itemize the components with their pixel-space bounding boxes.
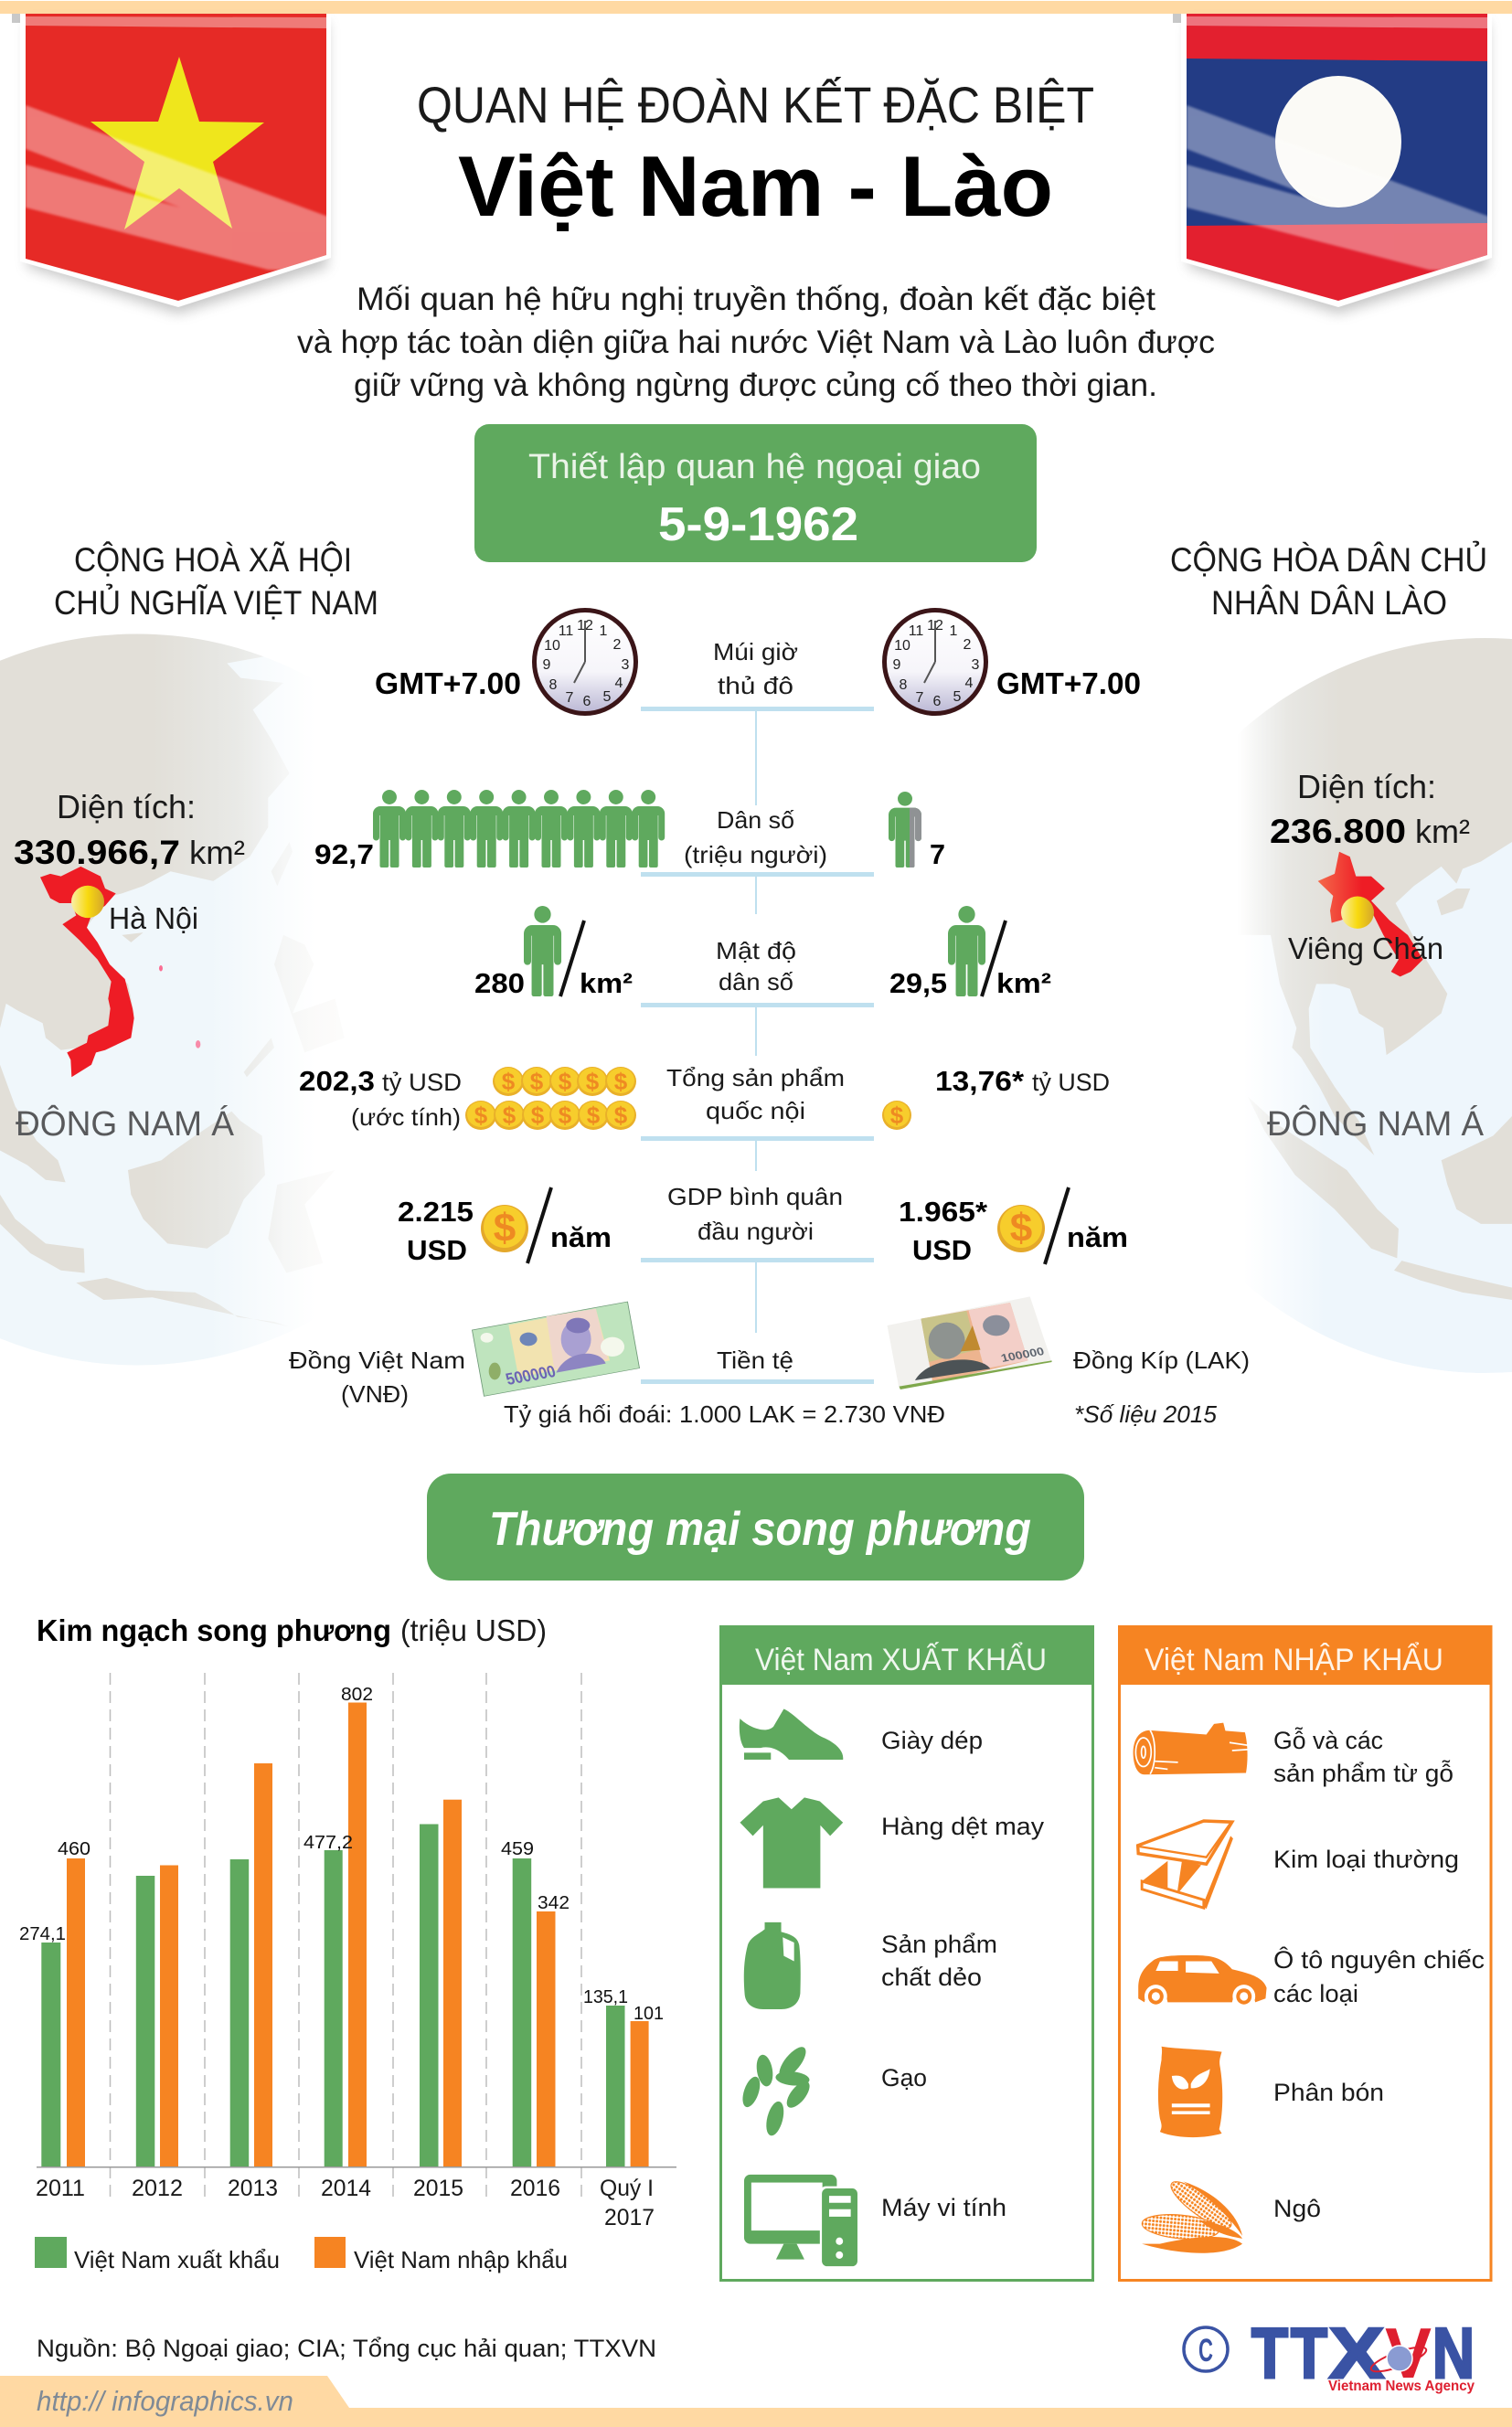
bar chart: bilateral trade turnover: Quý I <box>600 2176 654 2201</box>
heading: Laos official name <box>1170 540 1487 622</box>
chart title: Kim ngạch song phương <box>37 1613 391 1647</box>
panel: Vietnam imports: Kim loại thường <box>1273 1846 1459 1873</box>
Vietnam area and capital: Diện tích: <box>57 788 196 825</box>
density: Laos 29.5 per km2 <box>889 906 1051 999</box>
GDP: Laos: tỷ USD <box>1032 1069 1110 1096</box>
GDP: Vietnam coins: $ <box>559 1068 572 1095</box>
Vietnam area and capital: 330.966,7 <box>14 834 180 871</box>
clock right: 6 <box>933 694 942 709</box>
bar chart: bilateral trade turnover: 459 <box>501 1839 534 1859</box>
panel: Vietnam imports <box>1118 1625 1492 2280</box>
TTXVN logo: T <box>1291 2313 1327 2393</box>
GDP: Vietnam text <box>299 1065 462 1131</box>
GDP: Vietnam coins: $ <box>614 1068 628 1095</box>
title <box>417 76 1094 234</box>
label: Southeast Asia right: ĐÔNG NAM Á <box>1267 1103 1485 1144</box>
GDP: Vietnam coins: $ <box>474 1102 488 1129</box>
footer band <box>0 2376 1512 2427</box>
row labels: Múi giờ <box>713 638 798 665</box>
panel: Vietnam exports: Máy vi tính <box>881 2194 1006 2221</box>
panel: Vietnam exports: Gạo <box>881 2064 927 2092</box>
moon disc <box>1275 76 1401 208</box>
Laos area and capital <box>1270 768 1470 965</box>
panel: Vietnam imports: Ngô <box>1273 2195 1321 2222</box>
clock left: 2 <box>613 637 622 653</box>
row labels: Tiền tệ <box>717 1347 793 1374</box>
bar chart: bilateral trade turnover: 477,2 <box>303 1833 353 1853</box>
copyright mark <box>1184 2327 1228 2371</box>
bar chart: bilateral trade turnover: 2013 <box>228 2176 278 2201</box>
GDP: Vietnam coins: $ <box>614 1102 628 1129</box>
top band <box>0 1 1512 14</box>
GDP per capita: Vietnam: 2.215 <box>398 1196 474 1228</box>
GDP per capita: Laos: năm <box>1067 1221 1128 1253</box>
TTXVN logo <box>1251 2313 1475 2394</box>
right globe: Southeast Asia <box>1251 638 1512 1373</box>
clock left: 12 <box>577 618 593 633</box>
bar chart: bilateral trade turnover: 802 <box>341 1685 373 1705</box>
Vietnam area and capital: Hà Nội <box>109 901 198 935</box>
heading: Vietnam official name <box>54 541 378 622</box>
website link: http:// infographics.vn <box>37 2385 293 2417</box>
Vietnam area and capital: km² <box>189 834 245 871</box>
bar chart: bilateral trade turnover: 342 <box>538 1893 570 1913</box>
central comparison spine <box>641 707 874 1384</box>
Laos map <box>1318 852 1423 976</box>
Vietnam area and capital <box>14 788 245 935</box>
clock right: 5 <box>953 689 962 705</box>
Laos area and capital: km² <box>1415 813 1470 850</box>
bar chart: bilateral trade turnover <box>19 1673 676 2230</box>
GDP per capita: Laos: $ <box>1010 1206 1032 1251</box>
source: Nguồn: Bộ Ngoại giao; CIA; Tổng cục hải quan; TTXVN <box>37 2335 656 2362</box>
GDP: Vietnam coins: $ <box>531 1102 545 1129</box>
row labels: Dân số <box>717 806 794 834</box>
bar chart: bilateral trade turnover: 2011 <box>36 2176 85 2201</box>
GDP: Vietnam text: 202,3 <box>299 1065 375 1097</box>
population: Vietnam 92.7: 92,7 <box>314 838 374 870</box>
panel: Vietnam imports: các loại <box>1273 1980 1358 2007</box>
clock left <box>532 608 638 716</box>
density: Vietnam 280 per km2: km² <box>580 967 633 999</box>
panel: Vietnam exports: Sản phẩm <box>881 1931 997 1958</box>
panel: Vietnam exports: chất dẻo <box>881 1964 982 1991</box>
intro paragraph <box>297 282 1215 403</box>
panel: Vietnam imports: Gỗ và các <box>1273 1726 1383 1754</box>
clock right: 2 <box>964 637 972 653</box>
heading: Vietnam official name: CỘNG HOÀ XÃ HỘI <box>74 541 352 579</box>
label: Southeast Asia left: ĐÔNG NAM Á <box>16 1103 235 1144</box>
clock left: 9 <box>543 657 551 673</box>
copyright mark: C <box>1198 2333 1213 2368</box>
clock left: 10 <box>544 638 560 654</box>
row labels: Mật độ <box>716 937 796 964</box>
GDP: Vietnam coins: $ <box>587 1102 601 1129</box>
chart legend: Việt Nam nhập khẩu <box>354 2246 568 2273</box>
chart legend <box>35 2237 568 2273</box>
bar chart: bilateral trade turnover: 274,1 <box>19 1924 66 1944</box>
chart title: (triệu USD) <box>400 1613 547 1647</box>
currency: Lao banknote <box>888 1296 1052 1389</box>
intro paragraph: và hợp tác toàn diện giữa hai nước Việt Nam và Lào luôn được <box>297 325 1215 360</box>
exchange rate: Tỷ giá hối đoái: 1.000 LAK = 2.730 VNĐ <box>504 1400 945 1428</box>
row labels: quốc nội <box>706 1097 805 1124</box>
clock right: 7 <box>916 690 924 706</box>
section banner: bilateral trade: Thương mại song phương <box>489 1503 1031 1556</box>
density: Vietnam 280 per km2 <box>474 906 633 999</box>
clock left: 8 <box>549 677 558 693</box>
heading: Laos official name: CỘNG HÒA DÂN CHỦ <box>1170 540 1487 579</box>
intro paragraph: giữ vững và không ngừng được củng cố theo thời gian. <box>354 367 1157 403</box>
GDP per capita: Laos: USD <box>912 1234 972 1266</box>
density: Vietnam 280 per km2: 280 <box>474 967 525 999</box>
title: Việt Nam - Lào <box>458 138 1053 234</box>
diplomatic relations box: Thiết lập quan hệ ngoại giao <box>528 448 981 486</box>
currency: Lao label and footnote: *Số liệu 2015 <box>1074 1400 1218 1428</box>
left globe: Southeast Asia <box>0 634 294 1366</box>
bar chart: bilateral trade turnover: 460 <box>58 1839 91 1859</box>
GDP: Vietnam coins: $ <box>559 1102 572 1129</box>
Laos area and capital: Diện tích: <box>1297 768 1436 805</box>
Vietnam map <box>40 867 200 1077</box>
GDP: Vietnam coins: $ <box>530 1068 544 1095</box>
GDP per capita: Laos: 1.965* <box>899 1196 988 1228</box>
panel: Vietnam imports: Việt Nam NHẬP KHẨU <box>1145 1643 1443 1677</box>
GDP: Laos: 13,76* <box>935 1065 1025 1097</box>
bar chart: bilateral trade turnover: 2016 <box>510 2176 560 2201</box>
population: Laos 7: 7 <box>930 838 945 870</box>
GDP: Vietnam coins: $ <box>503 1102 516 1129</box>
currency: Vietnamese banknote: 500000 <box>504 1362 558 1389</box>
time zones <box>375 666 1141 700</box>
row labels <box>666 638 845 1374</box>
row labels: GDP bình quân <box>667 1183 843 1210</box>
TTXVN logo: V <box>1385 2313 1432 2393</box>
panel: Vietnam imports: sản phẩm từ gỗ <box>1273 1759 1453 1787</box>
GDP per capita: Vietnam <box>398 1187 612 1266</box>
bar chart: bilateral trade turnover: 2017 <box>604 2205 655 2230</box>
clock right: 11 <box>909 623 923 639</box>
bar chart: bilateral trade turnover: 2015 <box>413 2176 463 2201</box>
TTXVN logo: T <box>1251 2313 1288 2393</box>
panel: Vietnam exports <box>719 1625 1094 2280</box>
row labels: (triệu người) <box>684 841 827 868</box>
currency: Lao label and footnote <box>1073 1347 1250 1428</box>
row labels: Tổng sản phẩm <box>666 1064 845 1091</box>
heading: Vietnam official name: CHỦ NGHĨA VIỆT NAM <box>54 583 378 622</box>
Laos area and capital: 236.800 <box>1270 813 1406 850</box>
clock right: 9 <box>893 657 901 673</box>
panel: Vietnam imports: Ô tô nguyên chiếc <box>1273 1945 1485 1974</box>
clock left: 11 <box>559 623 573 639</box>
population: Laos 7 <box>889 792 945 870</box>
clock right: 3 <box>972 657 980 673</box>
currency: Vietnamese label: (VNĐ) <box>341 1380 409 1408</box>
Laos area and capital: Viêng Chăn <box>1288 931 1443 965</box>
clock left: 5 <box>603 689 612 705</box>
GDP: Laos: $ <box>890 1102 904 1129</box>
GDP: Vietnam coins: $ <box>586 1068 600 1095</box>
row labels: đầu người <box>697 1218 814 1245</box>
GDP: Vietnam coins: $ <box>502 1068 516 1095</box>
GDP: Vietnam text: tỷ USD <box>382 1069 462 1096</box>
clock right <box>882 608 988 716</box>
GDP: Vietnam coins <box>465 1067 636 1130</box>
density: Laos 29.5 per km2: 29,5 <box>889 967 947 999</box>
currency: Vietnamese label: Đồng Việt Nam <box>289 1347 465 1374</box>
chart legend: Việt Nam xuất khẩu <box>74 2246 280 2273</box>
population: Vietnam 92.7 <box>314 790 665 870</box>
GDP per capita: Vietnam: năm <box>550 1221 612 1253</box>
bar chart: bilateral trade turnover: 101 <box>634 2004 664 2024</box>
time zones: GMT+7.00 <box>375 666 521 700</box>
GDP per capita: Vietnam: $ <box>494 1206 516 1251</box>
panel: Vietnam exports: Việt Nam XUẤT KHẨU <box>755 1643 1047 1677</box>
GDP: Laos <box>882 1065 1110 1130</box>
bar chart: bilateral trade turnover: 135,1 <box>583 1987 628 2007</box>
star <box>91 57 264 229</box>
clock right: 1 <box>950 623 958 639</box>
density: Laos 29.5 per km2: km² <box>996 967 1051 999</box>
diplomatic relations box: 5-9-1962 <box>658 498 858 551</box>
panel: Vietnam exports: Giày dép <box>881 1727 983 1754</box>
time zones: GMT+7.00 <box>996 666 1141 700</box>
TTXVN logo: X <box>1329 2313 1384 2393</box>
clock right: 10 <box>894 638 910 654</box>
bar chart: bilateral trade turnover: 2012 <box>132 2176 183 2201</box>
clock right: 4 <box>965 676 974 691</box>
section banner: bilateral trade <box>427 1474 1084 1581</box>
panel: Vietnam exports: Hàng dệt may <box>881 1813 1045 1840</box>
panel: Vietnam imports: Phân bón <box>1273 2079 1384 2106</box>
GDP per capita: Laos <box>899 1187 1128 1266</box>
Laos flag banner <box>1173 14 1492 314</box>
row labels: thủ đô <box>718 672 793 699</box>
GDP per capita: Vietnam: USD <box>407 1234 467 1266</box>
currency: Vietnamese banknote <box>472 1302 640 1396</box>
clock right: 12 <box>927 618 943 633</box>
clock left: 4 <box>615 676 623 691</box>
heading: Laos official name: NHÂN DÂN LÀO <box>1211 584 1447 622</box>
clock left: 1 <box>600 623 608 639</box>
clock right: 8 <box>900 677 908 693</box>
currency: Lao banknote: 100000 <box>999 1345 1046 1365</box>
intro paragraph: Mối quan hệ hữu nghị truyền thống, đoàn kết đặc biệt <box>357 282 1155 317</box>
Vietnam flag banner <box>12 14 331 314</box>
diplomatic relations box <box>474 424 1037 562</box>
clock left: 6 <box>583 694 591 709</box>
GDP: Vietnam text: (ước tính) <box>351 1103 461 1131</box>
bar chart: bilateral trade turnover: 2014 <box>321 2176 371 2201</box>
export icons <box>740 1709 859 2268</box>
row labels: dân số <box>719 968 793 995</box>
TTXVN logo: N <box>1432 2313 1475 2393</box>
import icons <box>1134 1723 1267 2253</box>
title: QUAN HỆ ĐOÀN KẾT ĐẶC BIỆT <box>417 76 1094 133</box>
TTXVN logo: Vietnam News Agency <box>1328 2379 1475 2394</box>
clock left: 3 <box>622 657 630 673</box>
currency: Lao label and footnote: Đồng Kíp (LAK) <box>1073 1347 1250 1374</box>
clock left: 7 <box>566 690 574 706</box>
currency: Vietnamese label <box>289 1347 465 1408</box>
